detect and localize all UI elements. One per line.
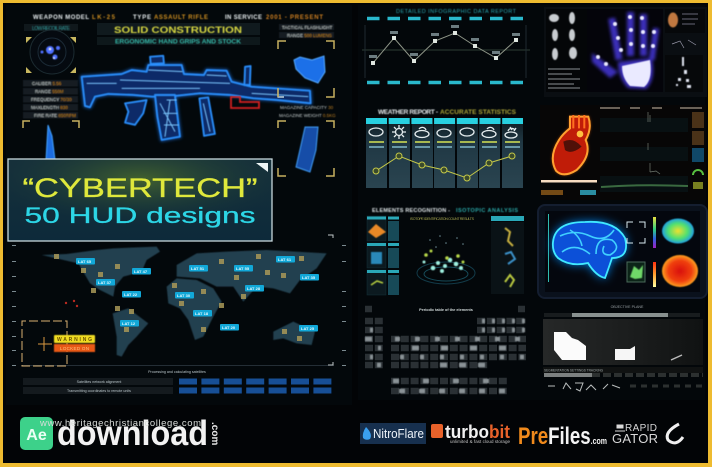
left stat labels: RANGE 550M [35, 89, 64, 94]
map location labels: LAT 65 [78, 259, 92, 264]
weapon header line: 2001 - PRESENT [266, 15, 323, 21]
panel: line chart data report: DETAILED INFOGRAPHIC DATA REPORT [396, 9, 517, 15]
left stat labels: CALIBER 5.56 [32, 81, 62, 86]
panel: tracking video [543, 305, 703, 391]
panel: weather report: ACCURATE STATISTICS [440, 109, 517, 116]
logo: Ae download.com: .com [209, 422, 220, 445]
solid construction heading: ERGONOMIC HAND GRIPS AND STOCK [115, 40, 242, 46]
map location labels [76, 256, 319, 332]
icon: glowing handprint [587, 9, 663, 92]
panel: elements recognition: ELEMENTS RECOGNITION - [372, 208, 450, 214]
weapon header line: TYPE [133, 15, 151, 21]
panel: line chart data report [362, 9, 530, 82]
target bracket with alert: WARNING [57, 337, 92, 343]
map location labels: LAT 28 [247, 286, 261, 291]
target bracket with alert [22, 321, 95, 366]
left stat labels: FIRE RATE 850RPM [34, 113, 76, 118]
vital stats icons [692, 112, 704, 189]
continents [42, 247, 327, 357]
focus brackets [627, 222, 645, 243]
panel: brain scan [538, 205, 707, 298]
weapon header line: ASSAULT RIFLE [154, 15, 208, 21]
map markers [54, 254, 304, 341]
sponsor logos row [360, 422, 683, 450]
weapon header line: LK-25 [92, 15, 116, 21]
icon: gator swirl [667, 424, 683, 443]
timeline strip: SEGMENTATION SETTINGS TRACKING [544, 368, 604, 372]
map location labels: LAT 35 [302, 275, 316, 280]
heat brain hot [662, 255, 698, 287]
lower right stat labels [279, 105, 336, 118]
radar widget [24, 24, 78, 74]
heat brain cool [662, 218, 694, 244]
video frame [543, 319, 703, 365]
line series [373, 33, 516, 63]
logo: Rapid Gator: GATOR [612, 431, 658, 446]
panel: elements recognition: ISOTOPE IDENTIFICATION COUNT RESULTS [410, 217, 475, 221]
fingerprint grid [546, 9, 587, 92]
target bracket with alert: LOCKED ON [60, 346, 89, 351]
map location labels: LAT 37 [98, 280, 112, 285]
logo: NitroFlare: NitroFlare [373, 427, 424, 441]
logo: Ae download.com: download [57, 414, 208, 453]
weather stats [369, 141, 520, 143]
logo: turbobit: turbobit [445, 422, 510, 442]
panel: grip detail [278, 41, 334, 97]
sample boxes [367, 216, 386, 295]
icon: blue sample [371, 252, 382, 264]
3D isotope scatter [417, 235, 475, 284]
map location labels: LAT 55 [236, 266, 250, 271]
icon: assault rifle hologram [82, 56, 311, 140]
chart value tags [369, 25, 520, 58]
white target bracket on rifle [278, 89, 284, 97]
solid construction heading: SOLID CONSTRUCTION [114, 25, 242, 36]
panel: bullet detail [23, 121, 79, 178]
panel: periodic table [365, 308, 527, 391]
title banner: “CYBERTECH” [22, 173, 258, 203]
panel: tracking video: OBJECTIVE PLANE [611, 305, 644, 309]
map location labels: LAT 18 [195, 311, 209, 316]
panel: world map [12, 235, 346, 394]
panel: elements recognition [367, 208, 524, 295]
heart scale bar [541, 180, 597, 182]
map data table [23, 370, 335, 394]
map location labels: LAT 12 [122, 321, 136, 326]
upper right stat labels [279, 24, 334, 38]
chart bottom labels [367, 81, 526, 84]
map location labels: LAT 51 [191, 266, 205, 271]
upper right stat labels: TACTICAL FLASHLIGHT [282, 25, 333, 30]
icon: molecule sample [371, 281, 383, 285]
panel: weather report [366, 109, 523, 188]
ECG traces [601, 112, 688, 187]
panel: weather report: WEATHER REPORT - [378, 109, 438, 116]
logo: Rapid Gator: RAPID [625, 423, 657, 434]
logo: PreFiles.com: PreFiles.com [518, 423, 607, 450]
map location labels: LAT 30 [177, 293, 191, 298]
title banner [8, 159, 272, 241]
map location labels: LAT 25 [301, 326, 315, 331]
side text columns [388, 221, 399, 295]
map data table: Processing and calculating satellites [148, 370, 206, 374]
suspect portrait [665, 9, 705, 33]
timeline strip [543, 367, 703, 391]
green scan tile [627, 262, 645, 282]
panel: elements recognition: ISOTOPIC ANALYSIS [456, 208, 518, 214]
panel: heart monitor [540, 105, 706, 200]
lower right stat labels: MAGAZINE CAPACITY 30 [280, 105, 334, 110]
map axes [12, 235, 346, 366]
icon: blue glowing brain [553, 222, 626, 278]
map data table: Satellites network alignment [77, 380, 121, 384]
left stat labels: FREQUENCY 70/30 [31, 97, 72, 102]
icon: glowing heart [553, 115, 590, 174]
icon: orange sample [368, 224, 386, 238]
map location labels: LAT 61 [278, 257, 292, 262]
logo: NitroFlare [360, 423, 426, 444]
solid construction heading [97, 23, 260, 46]
logo: Ae download.com: Ae [26, 427, 47, 444]
chart top labels [367, 17, 526, 20]
upper right stat labels: RANGE 500 LUMENS [287, 33, 332, 38]
weather icons [369, 125, 517, 139]
left stat labels: MAXLENGTH 830 [31, 105, 68, 110]
weapon header line [33, 15, 323, 21]
day columns [366, 118, 523, 188]
weapon header line: IN SERVICE [225, 15, 262, 21]
icon: red rail marker [231, 97, 259, 108]
map data table: Transmitting coordinates to remote units [67, 389, 131, 393]
radar widget: LOW RECOIL RATE [32, 26, 71, 32]
dot scan [665, 55, 703, 92]
map location labels: LAT 22 [124, 292, 138, 297]
panel: magazine detail [278, 121, 334, 176]
logo: turbobit: unlimited & fast cloud storage [450, 439, 510, 444]
temperature line [376, 156, 512, 178]
weapon header line: WEAPON MODEL [33, 15, 89, 21]
spectrum bars [653, 217, 656, 248]
title banner: 50 HUD designs [24, 203, 256, 228]
lower right stat labels: MAGAZINE WEIGHT 0.5KG [279, 113, 336, 118]
website watermark: www.heritagechristiancollege.com [39, 418, 201, 429]
molecules column [491, 216, 524, 294]
logo: Rapid Gator [612, 423, 658, 446]
vital signs labels [541, 108, 702, 195]
panel: hand scan [544, 7, 707, 97]
panel: weapon blueprint [23, 15, 336, 178]
left stat labels [23, 80, 78, 118]
red signal dots [65, 300, 78, 307]
map location labels: LAT 47 [134, 269, 148, 274]
panel: periodic table: Periodic table of the elements [419, 308, 473, 312]
map location labels: LAT 20 [222, 325, 236, 330]
small node graph [672, 40, 696, 48]
